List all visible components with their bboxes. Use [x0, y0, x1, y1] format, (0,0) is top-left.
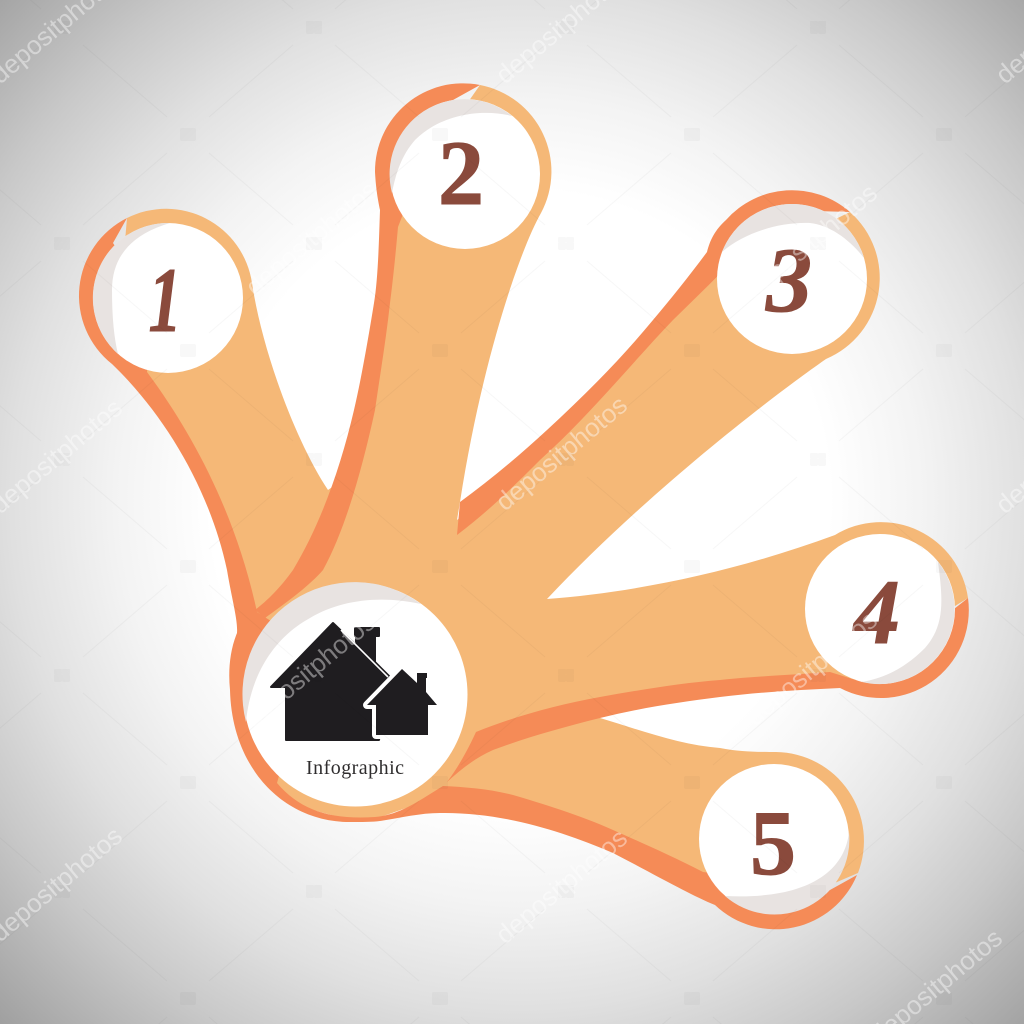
- node 2: [390, 99, 540, 249]
- central hub: [242, 582, 468, 806]
- hand silhouette: light orange fingers and discs: [120, 85, 968, 885]
- dark orange band: finger 1, hub and finger 5 edge: [79, 218, 857, 929]
- node 5: [699, 764, 849, 915]
- node 3: [717, 204, 867, 354]
- number 1: 1: [148, 251, 182, 352]
- watermark text: depositphotos: [490, 823, 633, 950]
- dark orange band: finger 2 edge: [255, 83, 480, 618]
- icon: two houses: [271, 623, 437, 740]
- watermark text: depositphotos: [740, 605, 883, 732]
- dark orange band: finger 4 edge: [447, 598, 969, 782]
- dark orange band: finger 3 edge: [457, 190, 850, 535]
- watermark text: depositphotos: [238, 607, 381, 734]
- number 3: 3: [765, 229, 812, 331]
- number 4: 4: [852, 561, 900, 663]
- watermark text: depositphotos: [240, 175, 383, 302]
- watermark text: depositphotos: [740, 178, 883, 305]
- number 5: 5: [750, 792, 796, 894]
- watermark text: depositphotos: [490, 390, 633, 517]
- hub label: Infographic: [306, 757, 404, 779]
- node 1: [93, 223, 243, 373]
- node 4: [805, 534, 955, 684]
- number 2: 2: [438, 122, 484, 224]
